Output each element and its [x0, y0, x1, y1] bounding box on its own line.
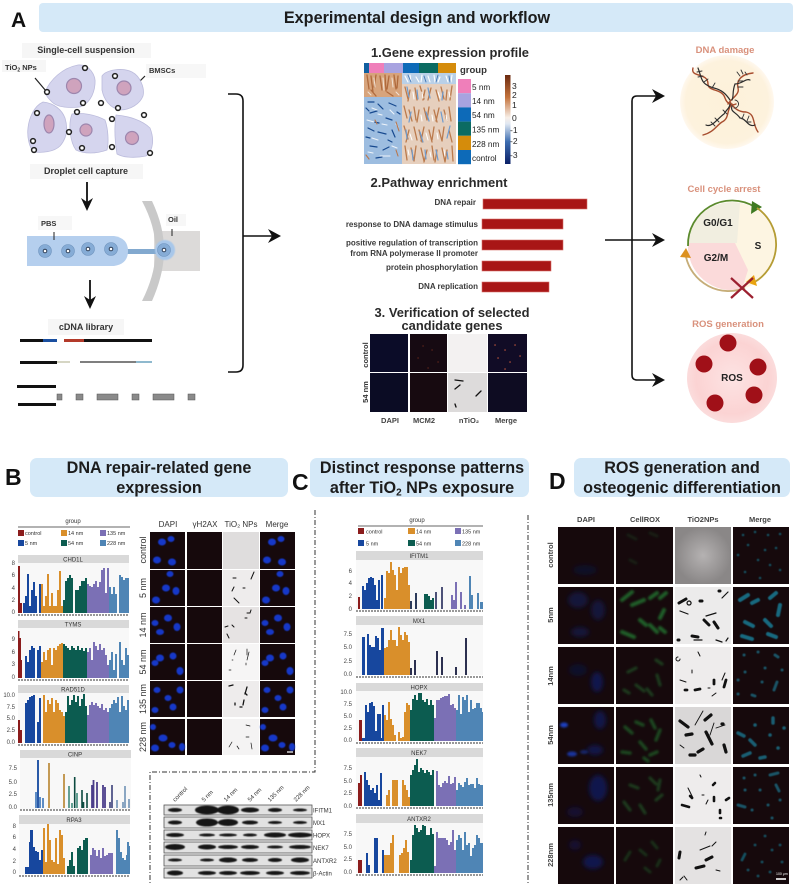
row labels	[546, 542, 555, 867]
row labels: 54nm	[546, 725, 555, 745]
bar chart: NEK7	[344, 748, 483, 810]
protein labels: ANTXR2	[313, 859, 337, 865]
bar chart: RPA3: 6	[13, 835, 17, 841]
pathway enrichment bar chart: protein phosphorylation	[386, 263, 478, 272]
protein labels	[313, 808, 337, 878]
heatmap group legend: 5 nm	[472, 83, 490, 92]
protein labels: MX1	[313, 821, 326, 827]
bar chart: RPA3: 0	[13, 870, 17, 876]
cell cycle arrest outcome: S	[755, 241, 762, 252]
pathway enrichment bar chart: response to DNA damage stimulus	[346, 220, 479, 229]
bar chart: NEK7: NEK7	[411, 751, 427, 757]
panel A heading banner: Experimental design and workflow	[284, 9, 551, 27]
lane labels: 228 nm	[293, 785, 312, 803]
heatmap group legend	[458, 65, 499, 164]
bar chart: IFITM1: 4	[349, 581, 353, 587]
column headings: CellROX	[630, 515, 660, 524]
cDNA library label	[48, 319, 124, 335]
column labels: Merge	[495, 416, 517, 425]
scale bar	[776, 872, 788, 879]
bar chart: TYMS: 6	[12, 650, 16, 656]
Oil label	[166, 214, 186, 236]
column headings: Merge	[266, 520, 289, 529]
bar chart: CINP	[9, 750, 131, 811]
panel C heading banner: NPs exposure	[402, 479, 514, 497]
row labels: 135nm	[546, 783, 555, 807]
BMSCs label: BMSCs	[149, 66, 175, 75]
heatmap colour scale: 1	[512, 100, 517, 110]
ROS generation outcome: ROS	[721, 373, 743, 384]
column headings: γH2AX	[193, 520, 218, 529]
lane labels: control	[172, 786, 189, 803]
group legend: 54 nm	[416, 542, 432, 548]
panel B: DNA repair-related gene expression	[3, 458, 337, 885]
heatmap colour scale: -3	[510, 150, 518, 160]
row labels	[361, 342, 370, 403]
heatmap group legend: control	[472, 154, 497, 163]
group legend: group	[65, 519, 81, 525]
row labels: 228 nm	[138, 722, 148, 752]
bar chart: IFITM1	[349, 551, 483, 613]
panel C: distinct response patterns	[292, 458, 529, 876]
protein labels: β-Actin	[313, 872, 332, 878]
column headings	[577, 515, 771, 524]
bar chart: HOPX: 5.0	[344, 714, 353, 720]
bar chart: CINP: 7.5	[9, 766, 18, 772]
panel D: ROS generation and osteogenic differentiation	[546, 458, 790, 884]
DNA damage outcome: DNA damage	[696, 45, 754, 56]
panel B heading banner: expression	[116, 479, 202, 497]
panel C heading banner: after TiO	[330, 479, 396, 497]
bar chart: RAD51D: 7.5	[7, 705, 16, 711]
heatmap colour scale	[505, 75, 518, 164]
panel D heading banner	[574, 458, 790, 497]
bar chart: MX1: 2.5	[344, 659, 353, 665]
BMSCs label	[137, 64, 206, 84]
panel D heading banner: osteogenic differentiation	[583, 479, 781, 497]
lane labels	[172, 785, 312, 803]
bar chart: NEK7: 5.0	[344, 779, 353, 785]
PBS label: PBS	[41, 219, 56, 228]
bar chart: IFITM1: 0	[349, 607, 353, 613]
row labels: control	[138, 536, 148, 564]
bar chart: HOPX: 7.5	[344, 702, 353, 708]
row labels	[138, 536, 148, 752]
panel B heading banner	[30, 458, 288, 497]
row labels: control	[546, 542, 555, 568]
verification micrographs	[361, 334, 527, 425]
heatmap group legend: 228 nm	[472, 140, 499, 149]
column headings: DAPI	[577, 515, 595, 524]
bar chart: CHD1L: CHD1L	[63, 558, 83, 564]
bar chart: RAD51D	[3, 685, 129, 746]
bar chart: ANTXR2: 7.5	[344, 832, 353, 838]
column labels: MCM2	[413, 416, 435, 425]
scale bar	[287, 751, 293, 753]
illustration: cell suspension	[28, 65, 153, 157]
column headings: TiO2NPs	[687, 515, 719, 524]
gamma-H2AX micrograph grid	[138, 520, 295, 755]
lane labels: 54 nm	[247, 787, 263, 803]
bar chart: HOPX: 0.0	[344, 738, 353, 744]
bar chart: MX1: 5.0	[344, 645, 353, 651]
bar chart: HOPX: 10.0	[340, 690, 353, 696]
column headings: Merge	[749, 515, 771, 524]
group legend: group	[409, 518, 425, 524]
arrow: down to droplet chip	[81, 182, 93, 211]
panel A heading banner	[39, 3, 793, 32]
bar chart: RPA3: 4	[13, 847, 17, 853]
group legend	[358, 518, 483, 548]
bar chart: TYMS	[12, 620, 129, 681]
protein labels: IFITM1	[313, 808, 333, 814]
TiO2 particles	[225, 572, 254, 749]
TiO2 NPs label: NPs	[20, 63, 37, 72]
TiO2 NPs label: TiO	[5, 63, 17, 72]
bar chart: RAD51D: 0.0	[7, 740, 16, 746]
bar chart: NEK7: 7.5	[344, 766, 353, 772]
group legend: 228 nm	[107, 541, 126, 547]
DNA damage outcome	[680, 45, 774, 149]
bar chart: ANTXR2: 0.0	[344, 870, 353, 876]
bar chart: CHD1L: 8	[12, 561, 16, 567]
scale bar: 100 μm	[776, 872, 788, 876]
column labels: DAPI	[381, 416, 399, 425]
group legend: 5 nm	[25, 541, 38, 547]
arrow: down to cDNA library	[84, 280, 96, 309]
row labels: 54 nm	[361, 381, 370, 403]
cell cycle arrest outcome: G0/G1	[703, 218, 733, 229]
cell cycle arrest outcome: G2/M	[704, 253, 728, 264]
TiO2 NPs label: 2	[17, 68, 20, 74]
row labels: 228nm	[546, 843, 555, 867]
heatmap group legend: 135 nm	[472, 126, 499, 134]
bar chart: MX1: MX1	[413, 619, 426, 625]
dash-dot separator between C and D	[527, 515, 529, 885]
bar chart: MX1	[344, 616, 483, 678]
bar chart: ANTXR2: ANTXR2	[407, 817, 431, 823]
pathway enrichment bar chart	[346, 198, 587, 292]
protein labels: HOPX	[313, 834, 330, 840]
bar chart: TYMS: 9	[12, 637, 16, 643]
protein labels: NEK7	[313, 846, 329, 852]
row labels: control	[361, 342, 370, 368]
bar chart: TYMS: TYMS	[65, 622, 81, 628]
bar chart: NEK7: 2.5	[344, 791, 353, 797]
row labels: 14 nm	[138, 612, 148, 638]
group legend: 228 nm	[462, 542, 481, 548]
bar chart: CHD1L	[12, 555, 129, 616]
group legend: 54 nm	[68, 541, 84, 547]
droplet cell capture label	[30, 164, 143, 179]
ROS generation outcome	[687, 319, 777, 423]
panel C letter: C	[292, 469, 309, 495]
CellROX column	[616, 527, 673, 884]
group legend: 14 nm	[416, 530, 432, 536]
western blot	[164, 785, 337, 878]
bar chart: RAD51D: 10.0	[3, 693, 16, 699]
gene expression profile heading: 1.Gene expression profile	[371, 46, 529, 60]
bar chart: MX1: 0.0	[344, 672, 353, 678]
bar chart: HOPX: 2.5	[344, 726, 353, 732]
row labels: 135 nm	[138, 684, 148, 714]
heatmap group legend: 54 nm	[472, 111, 495, 120]
row labels: 5nm	[546, 607, 555, 623]
bar chart: IFITM1: 2	[349, 594, 353, 600]
Merge column	[733, 527, 789, 884]
row labels: 54 nm	[138, 649, 148, 675]
TiO2 NPs column	[675, 527, 731, 884]
droplet cell capture label: Droplet cell capture	[44, 166, 128, 176]
bar chart: RPA3: 8	[13, 824, 17, 830]
verification heading: 3. Verification of selected	[374, 306, 530, 320]
bar chart: ANTXR2: 5.0	[344, 845, 353, 851]
column headings: DAPI	[159, 520, 177, 529]
bar chart: NEK7: 0.0	[344, 804, 353, 810]
pathway enrichment bar chart: DNA replication	[418, 282, 478, 291]
row labels: 14nm	[546, 666, 555, 686]
heatmap colour scale: -2	[510, 136, 518, 146]
Oil label: Oil	[168, 215, 178, 224]
cell cycle arrest outcome: Cell cycle arrest	[688, 184, 761, 195]
row labels: 5 nm	[138, 578, 148, 598]
panel D letter: D	[549, 468, 566, 494]
bar chart: IFITM1: IFITM1	[410, 554, 429, 560]
bar chart: MX1: 7.5	[344, 632, 353, 638]
heatmap colour scale: -1	[510, 125, 518, 135]
column labels: nTiO₂	[459, 416, 479, 425]
lane labels: 5 nm	[201, 790, 215, 803]
bar chart: TYMS: 0	[12, 675, 16, 681]
cell cycle arrest outcome	[680, 184, 776, 298]
panel A letter: A	[11, 9, 26, 32]
bar chart: RAD51D: 5.0	[7, 716, 16, 722]
heatmap colour scale: 0	[512, 113, 517, 123]
bar chart: CHD1L: 0	[12, 610, 16, 616]
column headings: TiO₂ NPs	[224, 520, 258, 529]
panel C heading banner	[310, 458, 529, 498]
single-cell suspension label	[22, 43, 151, 58]
bar chart: CINP: 5.0	[9, 780, 18, 786]
group legend: control	[366, 530, 383, 536]
DAPI column	[558, 527, 614, 884]
verification heading	[374, 306, 530, 333]
bar chart: ANTXR2	[344, 814, 483, 876]
group legend	[18, 519, 130, 547]
heatmap colour scale: 2	[512, 90, 517, 100]
dash-dot separators	[150, 510, 315, 885]
bar chart: RAD51D: RAD51D	[61, 688, 85, 694]
bar chart: RPA3	[13, 815, 130, 876]
illustration: droplet microfluidic chip	[27, 201, 200, 301]
bar chart: IFITM1: 6	[349, 569, 353, 575]
pathway enrichment heading: 2.Pathway enrichment	[370, 176, 508, 190]
bar chart: HOPX	[340, 683, 483, 744]
bar chart: CINP: 2.5	[9, 792, 18, 798]
bar chart: ANTXR2: 2.5	[344, 857, 353, 863]
bar chart: RPA3: RPA3	[66, 818, 82, 824]
heatmap	[364, 63, 456, 164]
bar chart: CINP: CINP	[68, 752, 82, 758]
bracket and arrow to results	[228, 94, 281, 372]
heatmap colour scale: 3	[512, 81, 517, 91]
cDNA library label: cDNA library	[59, 322, 113, 332]
heatmap group legend: group	[460, 65, 487, 76]
pathway enrichment bar chart: from RNA polymerase II promoter	[350, 249, 478, 258]
bar chart: CHD1L: 6	[12, 573, 16, 579]
lane labels: 14 nm	[223, 787, 239, 803]
PBS label	[38, 216, 72, 240]
panel C heading banner: Distinct response patterns	[320, 459, 524, 477]
bar chart: CHD1L: 2	[12, 598, 16, 604]
panel C heading banner: 2	[396, 488, 402, 498]
group legend: control	[25, 531, 42, 537]
group legend: 135 nm	[462, 530, 481, 536]
panel B letter: B	[5, 464, 22, 490]
bar chart: CHD1L: 4	[12, 586, 16, 592]
bar chart: CINP: 0.0	[9, 805, 18, 811]
bar chart: HOPX: HOPX	[410, 686, 428, 692]
bar chart: TYMS: 3	[12, 662, 16, 668]
single-cell suspension label: Single-cell suspension	[37, 45, 135, 55]
heatmap group legend: 14 nm	[472, 97, 495, 106]
merge nuclei	[260, 536, 295, 752]
verification heading: candidate genes	[402, 319, 503, 333]
group legend: 5 nm	[366, 542, 379, 548]
TiO2 NPs label	[2, 60, 46, 91]
lane labels: 135 nm	[267, 785, 286, 803]
pathway enrichment bar chart: DNA repair	[434, 198, 476, 207]
column labels	[381, 416, 517, 425]
column headings	[159, 520, 289, 529]
branching arrows to outcomes	[605, 89, 665, 387]
illustration: cDNA fragments	[17, 340, 195, 404]
group legend: 14 nm	[68, 531, 84, 537]
panel D heading banner: ROS generation and	[604, 459, 760, 477]
pathway enrichment bar chart: positive regulation of transcription	[346, 238, 478, 248]
panel A: experimental design and workflow	[2, 3, 793, 425]
DAPI nuclei	[150, 536, 185, 752]
group legend: 135 nm	[107, 531, 126, 537]
bar chart: RPA3: 2	[13, 859, 17, 865]
ROS generation outcome: ROS generation	[692, 319, 764, 330]
bar chart: RAD51D: 2.5	[7, 728, 16, 734]
panel B heading banner: DNA repair-related gene	[67, 459, 251, 477]
